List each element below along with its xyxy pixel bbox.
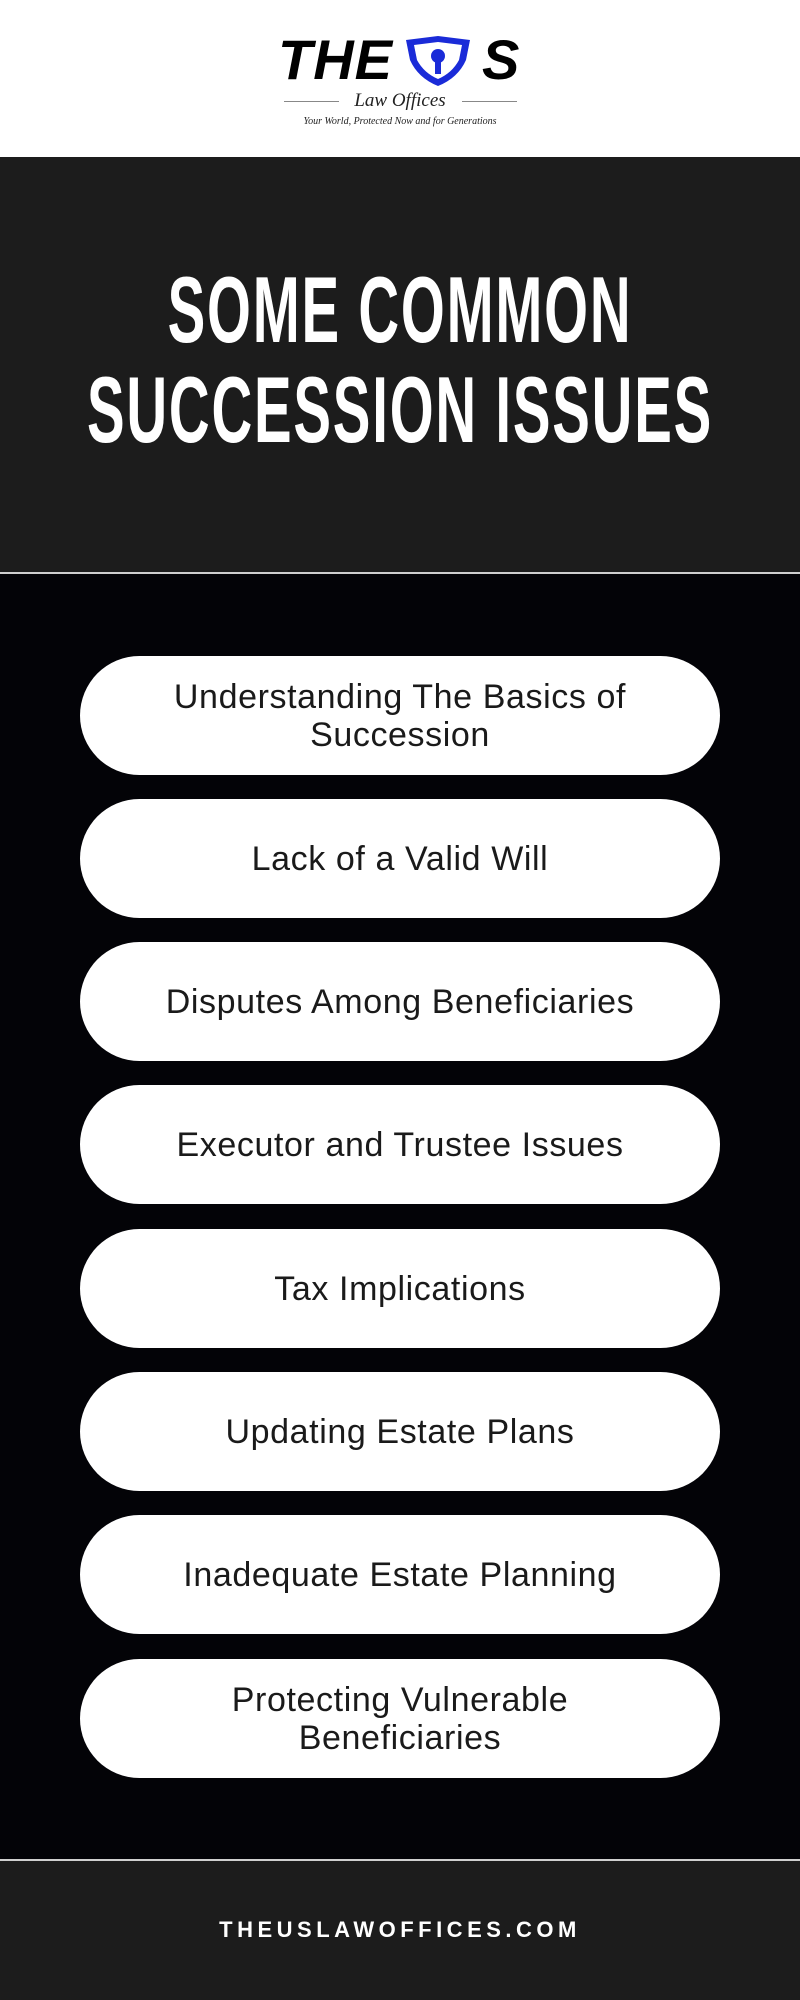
- pill 8: [80, 1659, 720, 1778]
- pill 3: Disputes Among Beneficiaries: [166, 982, 634, 1020]
- title: SOME COMMON: [168, 257, 632, 362]
- pill 1: [80, 656, 720, 775]
- logo: [278, 28, 519, 127]
- pill 6: [80, 1372, 720, 1491]
- pill 3: [80, 942, 720, 1061]
- pill 7: [80, 1515, 720, 1634]
- pill 2: [80, 799, 720, 918]
- title: [87, 257, 713, 462]
- pill 4: Executor and Trustee Issues: [176, 1126, 624, 1164]
- tagline: Your World, Protected Now and for Generations: [303, 116, 497, 127]
- title panel: [0, 157, 800, 574]
- pill 1: Understanding The Basics of Succession: [174, 678, 626, 754]
- header: logo area: [0, 0, 800, 157]
- logo subtitle: Law Offices: [354, 90, 446, 111]
- pill 5: [80, 1229, 720, 1348]
- logo wordmark: THE: [278, 28, 393, 91]
- pill 5: Tax Implications: [274, 1270, 526, 1308]
- list of issues: [80, 656, 720, 1778]
- footer: [0, 1859, 800, 2000]
- logo: S: [482, 28, 519, 91]
- icon: shield: [406, 36, 470, 86]
- pill 7: Inadequate Estate Planning: [183, 1556, 617, 1594]
- pill 6: Updating Estate Plans: [225, 1412, 575, 1450]
- pill 2: Lack of a Valid Will: [252, 840, 548, 878]
- pill 4: [80, 1085, 720, 1204]
- footer url: THEUSLAWOFFICES.COM: [219, 1917, 581, 1942]
- pill 8: Protecting Vulnerable Beneficiaries: [232, 1680, 568, 1756]
- title: SUCCESSION ISSUES: [87, 357, 713, 462]
